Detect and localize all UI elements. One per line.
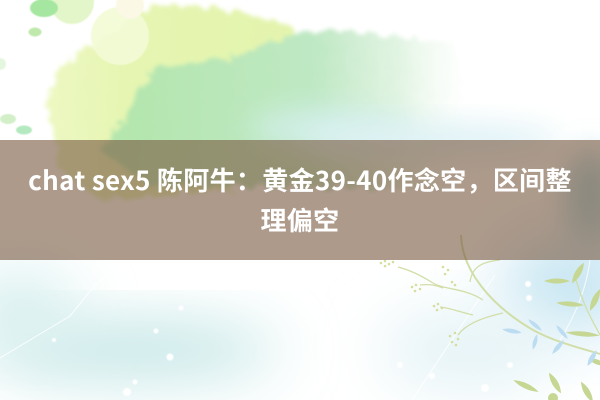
pale circle <box>91 7 149 65</box>
title: 理偏空 <box>260 201 340 238</box>
title <box>28 161 572 238</box>
translucent title band <box>0 140 600 260</box>
branch with leaves <box>380 235 600 400</box>
green bubbles <box>0 0 144 134</box>
pale blue wash <box>0 122 600 390</box>
title: chat sex5 陈阿牛：黄金39-40作念空，区间整 <box>28 161 572 198</box>
watercolor splash: green <box>100 30 470 190</box>
white dots <box>52 281 532 396</box>
white sparkle line <box>0 205 590 400</box>
watercolor splash: yellow-green <box>48 4 305 200</box>
